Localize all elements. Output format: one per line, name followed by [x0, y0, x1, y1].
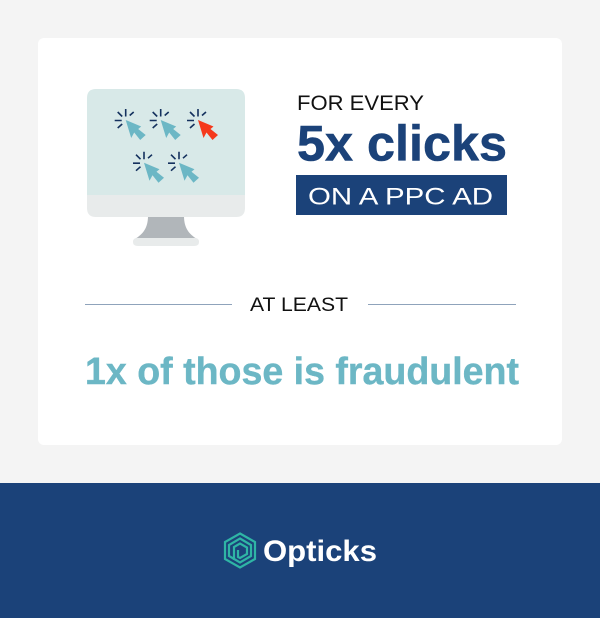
icon: computer monitor with cursors: [87, 89, 245, 246]
icon: red cursor: [187, 109, 218, 140]
icon: cursor 2: [150, 109, 181, 140]
label: on a ppc ad: [296, 175, 507, 215]
panel: white card: [38, 38, 562, 445]
text: for every: FOR EVERY: [297, 92, 424, 115]
icon: cursor 1: [115, 109, 146, 140]
heading: 5x clicks: 5x clicks: [297, 116, 507, 172]
text: at least: AT LEAST: [250, 295, 348, 316]
heading: 1x of those is fraudulent: 1x of those is fraudulent: [85, 351, 519, 393]
icon: Opticks hexagon logo: [225, 534, 255, 568]
icon: cursor 4: [133, 152, 164, 183]
panel: footer band: [0, 483, 600, 618]
icon: cursor 5: [168, 152, 199, 183]
text: Opticks wordmark: Opticks: [263, 535, 377, 568]
label: on a ppc ad: ON A PPC AD: [308, 184, 493, 210]
